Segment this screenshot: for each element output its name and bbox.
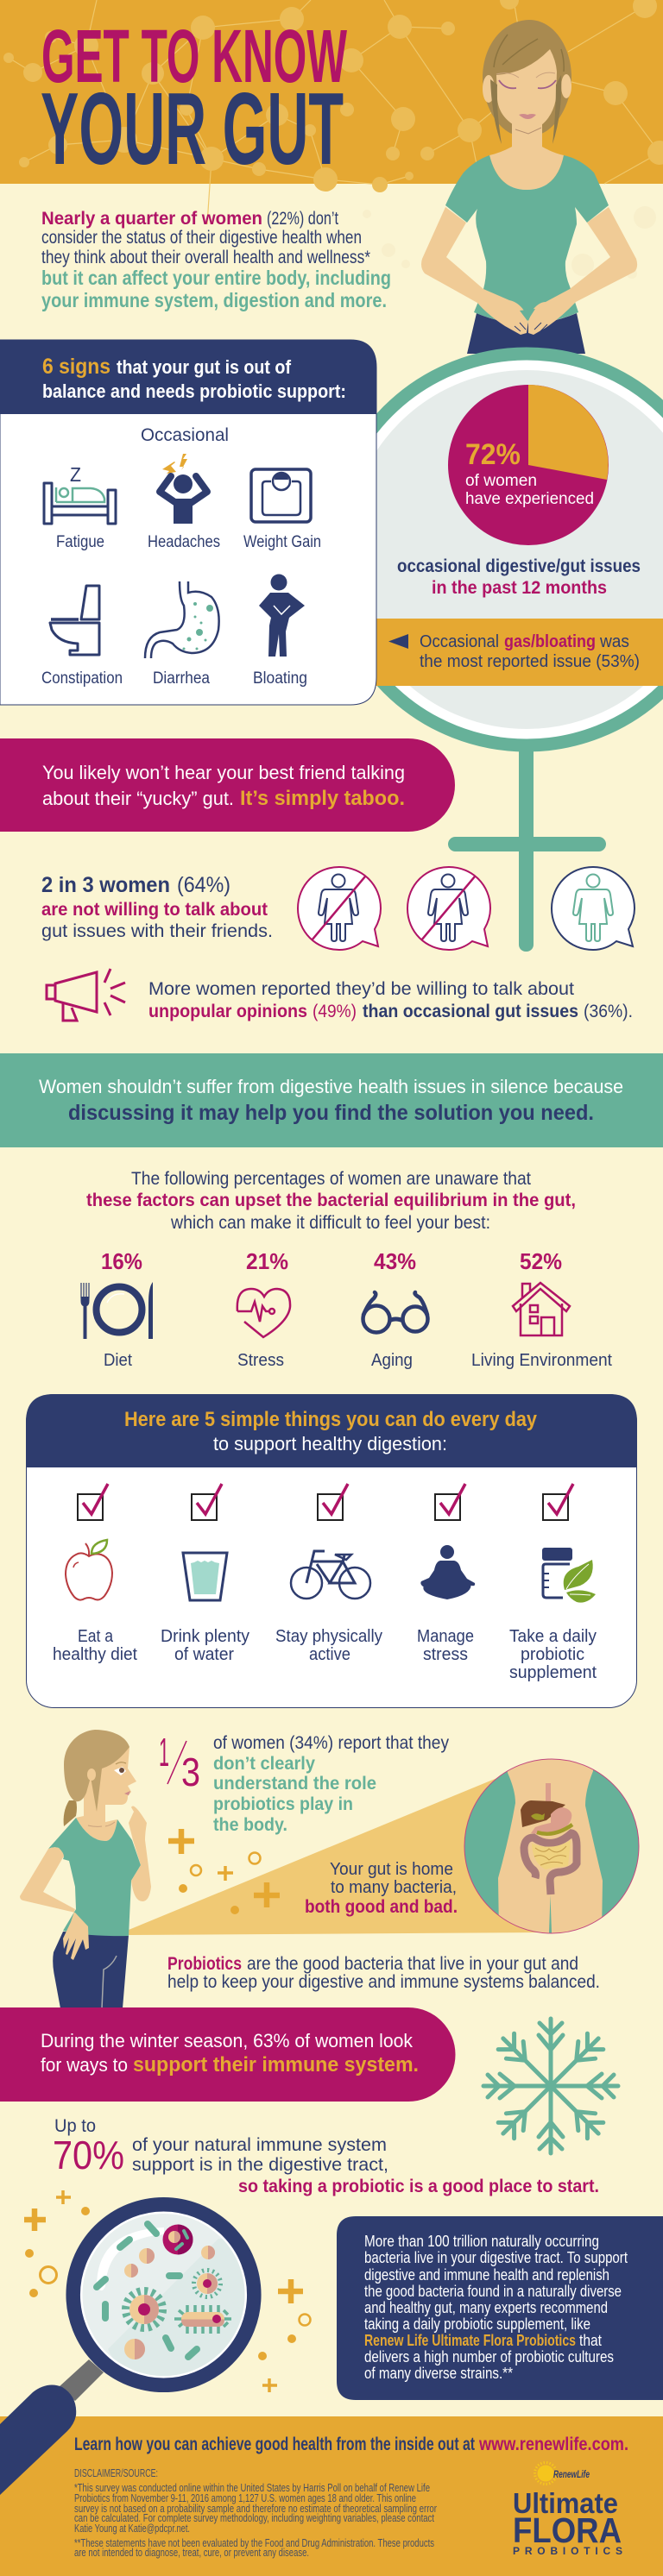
callout: gas/bloating band: Occasional bbox=[420, 632, 499, 651]
text: up to 70%: Up to bbox=[54, 2116, 96, 2136]
illustration: thinking woman bbox=[20, 1730, 151, 2008]
panel: probiotics info box: taking a daily probiotic supplement, like bbox=[364, 2315, 590, 2333]
icon: fatigue bed bbox=[44, 463, 116, 524]
stat: stress 21%: Stress bbox=[237, 1351, 284, 1370]
illustration: woman with hands on belly bbox=[421, 20, 637, 354]
panel: taboo banner: You likely won’t hear your best friend talking bbox=[42, 762, 405, 783]
panel: taboo banner bbox=[0, 738, 455, 832]
occasional issues caption: occasional digestive/gut issues bbox=[397, 556, 641, 576]
logo: Renew Life Ultimate Flora Probiotics: FLORA bbox=[513, 2510, 622, 2550]
icon: meditation bbox=[420, 1545, 475, 1599]
panel: probiotics info box: of many diverse strains.** bbox=[364, 2365, 513, 2382]
fraction: one third: 3 bbox=[181, 1750, 200, 1794]
logo: Renew Life Ultimate Flora Probiotics: Ultimate bbox=[513, 2487, 618, 2519]
logo: Renew Life Ultimate Flora Probiotics: PROBIOTICS bbox=[513, 2545, 622, 2557]
text: up to 70%: support is in the digestive tract, bbox=[132, 2155, 388, 2175]
text: factors intro: these factors can upset the bacterial equilibrium in the gut, bbox=[86, 1191, 576, 1210]
text: probiotics understanding: the body. bbox=[213, 1815, 287, 1835]
text: factors intro: which can make it difficult to feel your best: bbox=[170, 1213, 490, 1233]
text: probiotics understanding: don’t clearly bbox=[213, 1754, 315, 1774]
illustration: digestive system circle bbox=[464, 1758, 639, 1934]
text: probiotics understanding: of women (34%) report that they bbox=[213, 1733, 449, 1753]
item: manage stress bbox=[417, 1545, 475, 1664]
text: probiotics understanding bbox=[213, 1733, 449, 1835]
item: eat a healthy diet: Eat a bbox=[78, 1627, 114, 1646]
title: GET TO KNOW bbox=[41, 15, 348, 98]
pie chart: 72% of women: 72% bbox=[465, 438, 521, 471]
item: manage stress: Manage bbox=[417, 1627, 474, 1646]
magnified beam bbox=[129, 1775, 552, 1935]
text: up to 70%: so taking a probiotic is a good place to start. bbox=[238, 2177, 599, 2196]
icon: heart with pulse bbox=[237, 1289, 290, 1337]
item: eat a healthy diet bbox=[53, 1540, 137, 1664]
fraction: one third bbox=[159, 1730, 200, 1794]
female symbol bbox=[331, 354, 663, 952]
item: stay active: Stay physically bbox=[275, 1627, 382, 1646]
icon: megaphone bbox=[47, 969, 125, 1021]
text: up to 70%: of your natural immune system bbox=[132, 2135, 387, 2155]
disclaimer: DISCLAIMER/SOURCE: bbox=[74, 2467, 158, 2479]
item: eat a healthy diet: healthy diet bbox=[53, 1645, 137, 1664]
icon: headache person bbox=[160, 454, 207, 524]
text: unpopular opinions: More women reported they’d be willing to talk about bbox=[148, 979, 574, 999]
stat: aging 43% bbox=[363, 1248, 428, 1370]
panel: taboo banner: It’s simply taboo. bbox=[240, 787, 405, 810]
panel heading: 5 simple things bbox=[124, 1408, 538, 1454]
logo: Renew Life Ultimate Flora Probiotics: RenewLife bbox=[553, 2470, 590, 2480]
icon: stomach bbox=[145, 581, 219, 658]
text: probiotics definition bbox=[167, 1954, 600, 1992]
pie chart: 72% of women: have experienced bbox=[465, 490, 594, 508]
pie chart: 72% of women: of women bbox=[465, 472, 537, 490]
icon: bicycle bbox=[291, 1551, 370, 1599]
icon: crossed-out speech bubble 1 bbox=[298, 867, 381, 950]
label: Bloating: Bloating bbox=[253, 669, 307, 688]
intro text: consider the status of their digestive health when bbox=[41, 228, 362, 248]
stat: living environment 52%: 52% bbox=[520, 1248, 562, 1274]
label: Fatigue: Fatigue bbox=[56, 533, 104, 551]
stat: stress 21%: 21% bbox=[246, 1248, 288, 1274]
footer call to action: Learn how you can achieve good health from the inside out at bbox=[74, 2435, 475, 2454]
item: probiotic supplement bbox=[509, 1548, 597, 1682]
text: probiotics definition: help to keep your digestive and immune systems balanced. bbox=[167, 1972, 600, 1992]
disclaimer: are not intended to diagnose, treat, cure, or prevent any disease. bbox=[74, 2547, 309, 2559]
text: 2 in 3 women: are not willing to talk about bbox=[41, 900, 268, 920]
stat: diet 16%: Diet bbox=[104, 1351, 132, 1370]
label: Diarrhea: Diarrhea bbox=[153, 669, 210, 688]
panel: teal banner bbox=[0, 1053, 663, 1147]
stat: diet 16%: 16% bbox=[101, 1248, 142, 1274]
text: unpopular opinions: than occasional gut issues bbox=[363, 1002, 578, 1021]
intro text bbox=[41, 209, 391, 311]
text: up to 70%: 70% bbox=[53, 2133, 124, 2177]
panel: probiotics info box: digestive and immune health and replenish bbox=[364, 2266, 609, 2284]
item: drink water: Drink plenty bbox=[161, 1627, 249, 1646]
decorative marks around magnifier bbox=[24, 2190, 311, 2392]
item: probiotic supplement: probiotic bbox=[521, 1645, 584, 1664]
icon: plate and cutlery bbox=[81, 1282, 153, 1339]
text: 2 in 3 women: 2 in 3 women bbox=[41, 873, 170, 897]
icon: snowflake bbox=[483, 2019, 618, 2153]
panel heading: 5 simple things: to support healthy digestion: bbox=[213, 1433, 447, 1454]
stat: living environment 52%: Living Environment bbox=[471, 1351, 612, 1370]
decorative bacteria marks bbox=[168, 1829, 280, 1914]
panel: 6 signs bbox=[0, 340, 376, 705]
fraction: one third: 1 bbox=[159, 1730, 169, 1775]
item: manage stress: stress bbox=[423, 1645, 468, 1664]
label: Constipation: Constipation bbox=[41, 669, 123, 688]
panel: teal banner: discussing it may help you find the solution you need. bbox=[68, 1101, 594, 1125]
text: factors intro: The following percentages of women are unaware that bbox=[131, 1169, 531, 1189]
panel: 5 simple things bbox=[26, 1394, 637, 1708]
icon: crossed-out speech bubble 2 bbox=[407, 867, 490, 950]
icon: apple bbox=[66, 1540, 112, 1600]
panel: winter banner: for ways to bbox=[41, 2054, 128, 2076]
panel: probiotics info box: More than 100 trillion naturally occurring bbox=[364, 2233, 599, 2250]
icon: weight scale bbox=[251, 469, 311, 522]
title bbox=[41, 15, 348, 186]
item: probiotic supplement: Take a daily bbox=[509, 1627, 597, 1646]
text: probiotics understanding: understand the role bbox=[213, 1774, 376, 1794]
intro text: Nearly a quarter of women bbox=[41, 209, 262, 229]
panel: winter banner: support their immune system. bbox=[133, 2053, 419, 2077]
callout: gas/bloating band: the most reported issue (53%) bbox=[420, 652, 640, 671]
panel: teal banner: Women shouldn’t suffer from digestive health issues in silence because bbox=[39, 1076, 623, 1097]
label: Weight Gain: Weight Gain bbox=[243, 533, 321, 551]
text: gut home to bacteria: both good and bad. bbox=[305, 1897, 458, 1917]
disclaimer: Probiotics from November 9-11, 2016 among 1,127 U.S. women ages 18 and older. This online bbox=[74, 2492, 416, 2504]
item: drink water: of water bbox=[174, 1645, 234, 1664]
intro text: but it can affect your entire body, including bbox=[41, 267, 391, 289]
pie chart: 72% of women bbox=[448, 385, 609, 545]
panel heading: 6 signs: that your gut is out of bbox=[117, 356, 292, 378]
callout: gas/bloating band: was bbox=[599, 632, 629, 651]
intro text: they think about their overall health and wellness* bbox=[41, 248, 370, 267]
occasional issues caption: in the past 12 months bbox=[432, 578, 607, 598]
panel heading: 5 simple things: Here are 5 simple things you can do every day bbox=[124, 1408, 538, 1431]
icon: open speech bubble bbox=[552, 867, 635, 950]
item: stay active: active bbox=[309, 1645, 350, 1664]
stat: stress 21% bbox=[237, 1248, 290, 1370]
header background bbox=[0, 0, 663, 279]
text: gut home to bacteria: to many bacteria, bbox=[331, 1878, 457, 1897]
label: Occasional: Occasional bbox=[141, 425, 229, 445]
stat: diet 16% bbox=[81, 1248, 153, 1370]
text: 2 in 3 women: (64%) bbox=[177, 873, 230, 897]
title: YOUR GUT bbox=[41, 72, 344, 186]
icon: glasses bbox=[363, 1292, 428, 1332]
text: 2 in 3 women: gut issues with their friends. bbox=[41, 921, 273, 941]
text: factors intro bbox=[86, 1169, 576, 1233]
item: drink water bbox=[161, 1553, 249, 1664]
panel: probiotics info box: that bbox=[579, 2332, 602, 2349]
disclaimer: **These statements have not been evaluated by the Food and Drug Administration. These products bbox=[74, 2537, 434, 2549]
text: unpopular opinions: unpopular opinions bbox=[148, 1002, 307, 1021]
footer background bbox=[0, 2416, 663, 2576]
icon: fatigue bed: Z bbox=[70, 463, 81, 486]
panel heading: 6 signs: 6 signs bbox=[42, 355, 110, 379]
logo: Renew Life Ultimate Flora Probiotics bbox=[513, 2462, 622, 2557]
icon: toilet bbox=[50, 586, 99, 655]
icon: bloating person bbox=[259, 575, 305, 657]
panel: taboo banner: about their “yucky” gut. bbox=[42, 788, 234, 809]
icon: house bbox=[513, 1283, 570, 1335]
stat: living environment 52% bbox=[471, 1248, 612, 1370]
text: gut home to bacteria bbox=[305, 1860, 458, 1917]
item: stay active bbox=[275, 1551, 382, 1664]
icon: bottle with leaves bbox=[542, 1548, 596, 1603]
item: probiotic supplement: supplement bbox=[509, 1663, 597, 1682]
text: probiotics definition: are the good bacteria that live in your gut and bbox=[247, 1954, 578, 1974]
intro text: your immune system, digestion and more. bbox=[41, 289, 387, 311]
illustration: magnifying glass with bacteria bbox=[0, 2204, 259, 2495]
stat: aging 43%: 43% bbox=[374, 1248, 416, 1274]
callout: gas/bloating band: gas/bloating bbox=[504, 632, 596, 651]
text: unpopular opinions bbox=[148, 979, 633, 1021]
text: unpopular opinions: (36%). bbox=[584, 1002, 633, 1021]
intro text: (22%) don’t bbox=[267, 209, 338, 229]
text: probiotics understanding: probiotics play in bbox=[213, 1794, 353, 1814]
panel: winter banner bbox=[0, 2007, 456, 2102]
stat: aging 43%: Aging bbox=[371, 1351, 413, 1370]
disclaimer bbox=[74, 2467, 437, 2559]
panel: winter banner: During the winter season, 63% of women look bbox=[41, 2030, 414, 2051]
occasional issues caption bbox=[397, 556, 641, 598]
checkboxes bbox=[78, 1484, 573, 1520]
panel: probiotics info box bbox=[337, 2216, 663, 2400]
panel: probiotics info box: delivers a high number of probiotic cultures bbox=[364, 2348, 614, 2366]
icon: glass of water bbox=[183, 1553, 227, 1600]
text: probiotics definition: Probiotics bbox=[167, 1954, 242, 1974]
panel: probiotics info box: and healthy gut, many experts recommend bbox=[364, 2299, 608, 2316]
callout: gas/bloating band bbox=[371, 619, 663, 686]
text: 2 in 3 women bbox=[41, 873, 273, 941]
text: unpopular opinions: (49%) bbox=[313, 1002, 357, 1021]
text: gut home to bacteria: Your gut is home bbox=[330, 1860, 453, 1879]
disclaimer: can be calculated. For complete survey methodology, including weighting variables, please contact bbox=[74, 2512, 434, 2524]
panel heading: 6 signs bbox=[42, 355, 346, 402]
disclaimer: *This survey was conducted online within the United States by Harris Poll on behalf of Renew Life bbox=[74, 2482, 430, 2494]
label: Headaches: Headaches bbox=[148, 533, 220, 551]
text: up to 70% bbox=[53, 2116, 599, 2196]
panel: probiotics info box: Renew Life Ultimate Flora Probiotics bbox=[364, 2332, 576, 2349]
disclaimer: Katie Young at Katie@pdcpr.net. bbox=[74, 2523, 190, 2535]
disclaimer: survey is not based on a probability sample and therefore no estimate of theoretical sampling error bbox=[74, 2503, 437, 2515]
footer call to action: www.renewlife.com. bbox=[478, 2435, 628, 2454]
panel heading: 6 signs: balance and needs probiotic support: bbox=[42, 380, 346, 402]
